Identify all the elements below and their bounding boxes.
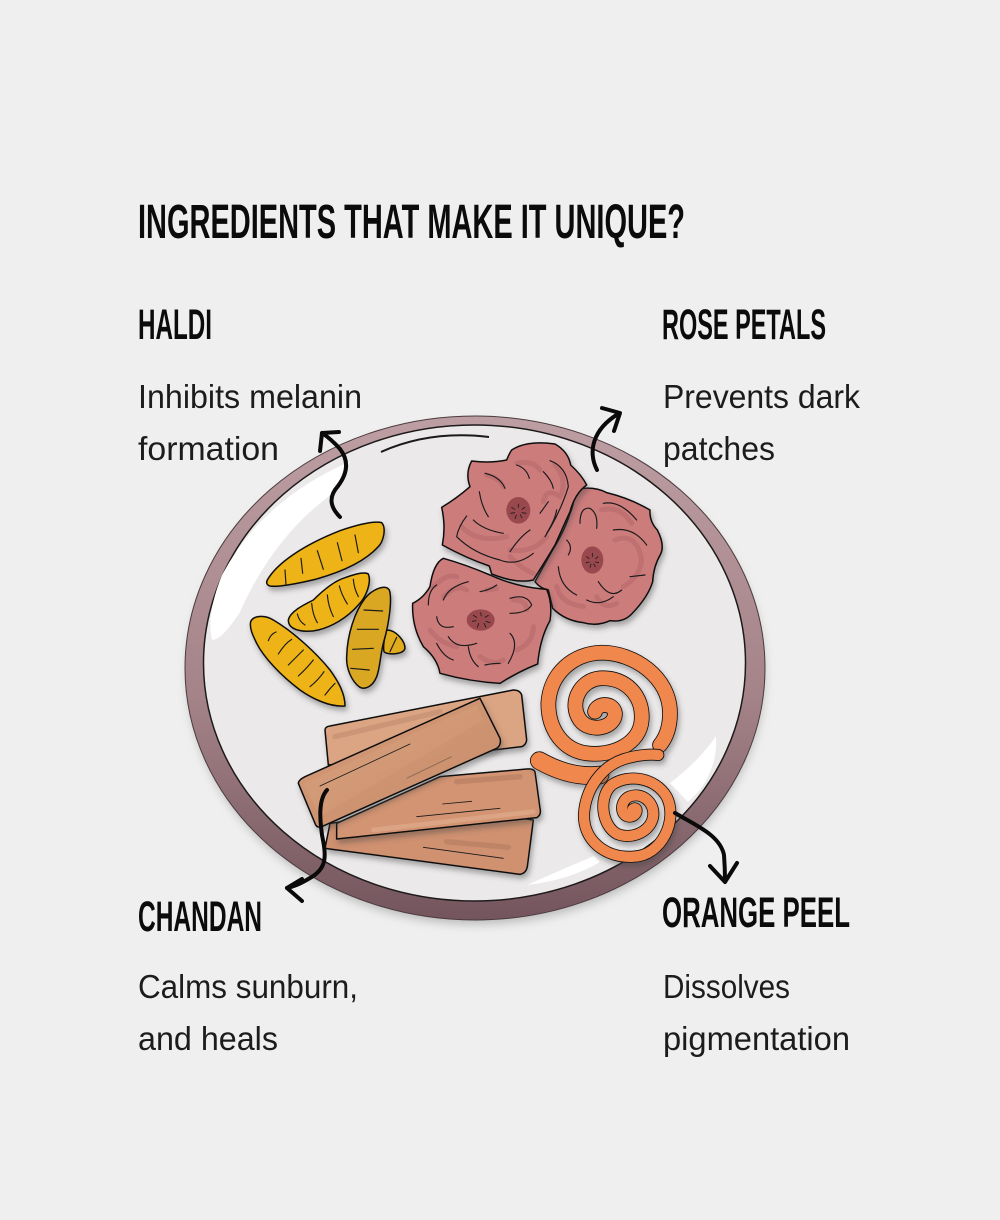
label: rose petals: Prevents dark (663, 378, 860, 415)
label: rose petals (662, 301, 860, 467)
plate highlight: top left (210, 462, 349, 640)
label: chandan: and heals (138, 1020, 278, 1057)
plate top line (381, 435, 489, 452)
sandalwood stick: bottom (325, 807, 533, 874)
label: orange peel (662, 889, 850, 1057)
label: rose petals: ROSE PETALS (662, 301, 826, 349)
turmeric piece: top (267, 522, 384, 586)
ingredient: haldi (turmeric) (250, 522, 405, 706)
orange peel tail (539, 761, 600, 776)
label: chandan: Calms sunburn, (138, 968, 358, 1005)
label: haldi: Inhibits melanin (138, 378, 362, 415)
sandalwood stick: back (325, 690, 527, 765)
label: chandan: CHANDAN (138, 893, 262, 941)
rose flower: bottom (413, 558, 551, 683)
plate highlight: bottom right (527, 736, 716, 885)
arrow: haldi (320, 432, 346, 517)
label: orange peel: pigmentation (663, 1020, 850, 1057)
label: orange peel: Dissolves (663, 968, 790, 1005)
turmeric piece: left (250, 616, 345, 706)
label: chandan (138, 893, 358, 1057)
sandalwood stick: middle (337, 769, 540, 839)
label: haldi: HALDI (138, 301, 212, 349)
orange peel spiral: small (584, 755, 670, 857)
ingredient: orange peel (539, 653, 670, 857)
sandalwood stick: front (298, 698, 500, 827)
rose flower: top (442, 443, 587, 581)
turmeric piece: right (347, 587, 405, 688)
arrow: rose petals (593, 408, 620, 470)
label: haldi (138, 301, 362, 467)
plate (185, 416, 765, 924)
label: haldi: formation (138, 430, 279, 467)
label: rose petals: patches (663, 430, 775, 467)
turmeric piece: middle (288, 573, 369, 631)
label: orange peel: ORANGE PEEL (662, 889, 850, 937)
arrow: orange peel (675, 813, 737, 882)
arrow: chandan (287, 790, 327, 901)
rose flower: right (535, 488, 662, 624)
orange peel spiral: large (548, 653, 670, 754)
ingredient: rose petals (413, 443, 662, 683)
ingredient: chandan (sandalwood sticks) (298, 690, 540, 874)
